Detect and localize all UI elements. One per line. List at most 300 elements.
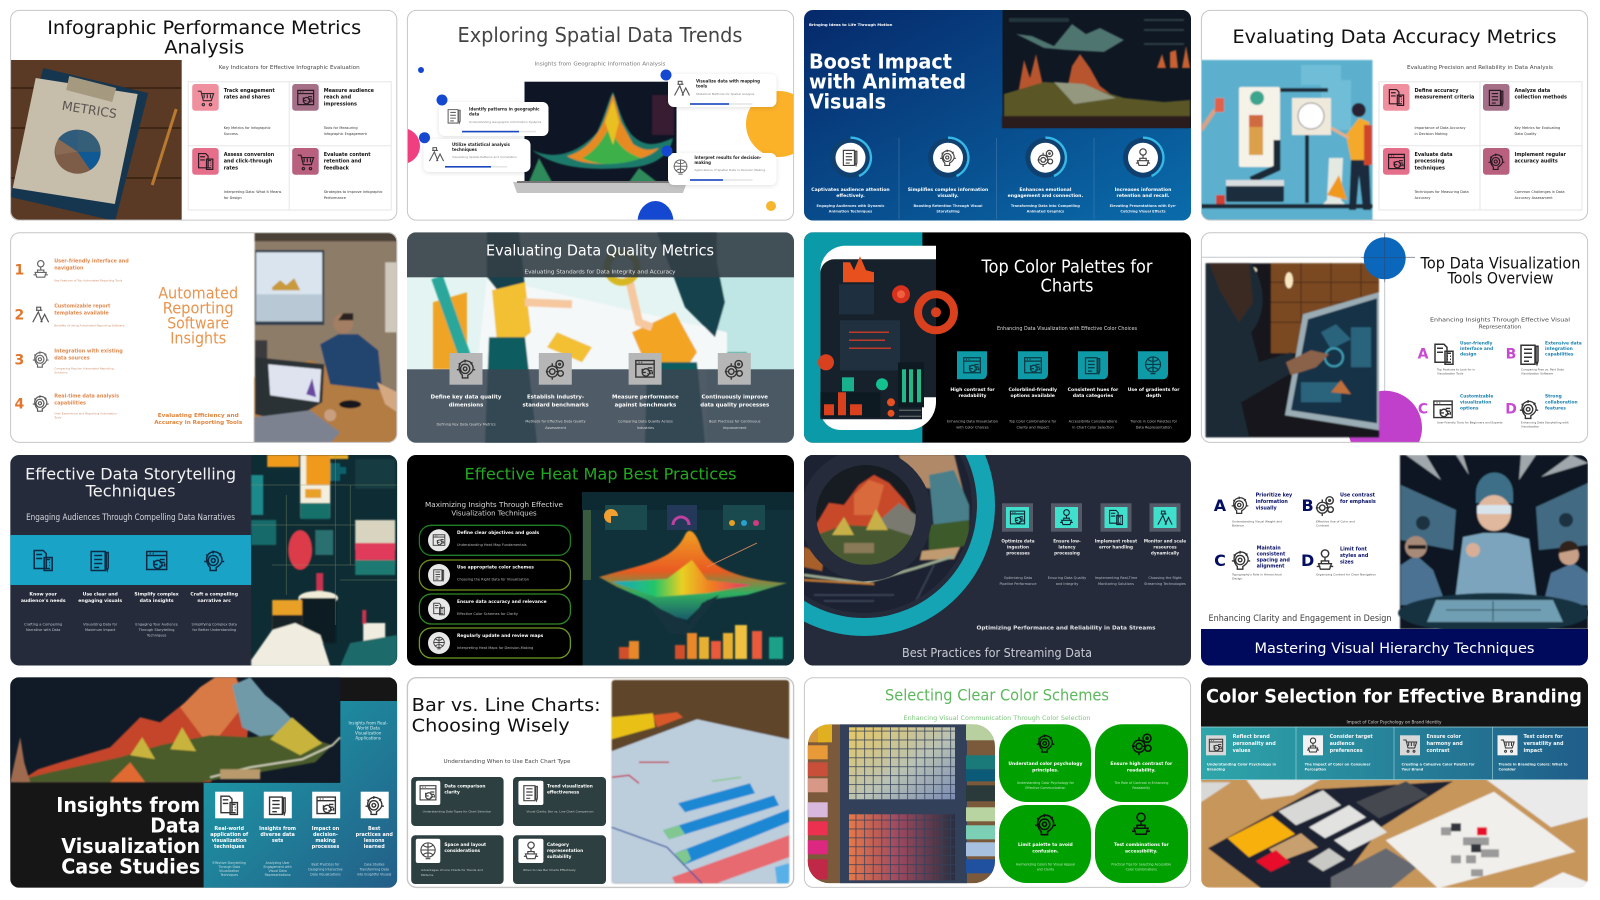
subtitle: Visualization Techniques bbox=[451, 510, 537, 518]
panel: Evaluating Data Quality Metrics bbox=[407, 232, 794, 443]
subtitle bbox=[1430, 317, 1571, 330]
item A bbox=[1418, 340, 1493, 375]
item: diverse data: Engagement with bbox=[264, 865, 292, 869]
item: analyze collection: collection methods bbox=[1514, 95, 1567, 101]
item: target audience: preferences bbox=[1330, 748, 1363, 754]
item: colorblind bbox=[1008, 351, 1057, 429]
tile: color psychology: principles. bbox=[1032, 767, 1059, 773]
pill: color schemes: Choosing the Right Data for Visualization bbox=[457, 578, 529, 582]
card: category representation: When to Use Bar Charts Effectively bbox=[523, 868, 576, 872]
item: target audience: Perception bbox=[1305, 767, 1326, 771]
item: dimensions: dimensions bbox=[449, 403, 483, 409]
panel: Bar vs. Line Charts: Choosing Wisely bbox=[407, 677, 794, 888]
item: know audience: Crafting a Compelling bbox=[24, 622, 62, 626]
item C: consistent bbox=[1257, 552, 1286, 558]
title bbox=[49, 20, 360, 58]
item 2: Benefits of Using Automated Reporting Software bbox=[54, 323, 125, 327]
subtitle: Enhancing Visual Communication Through Color Selection bbox=[904, 715, 1091, 722]
item 3: Integration with existing bbox=[54, 348, 123, 354]
item A: information bbox=[1256, 499, 1288, 505]
tile: high contrast: Ensure high contrast for bbox=[1110, 761, 1173, 767]
item: contrast: readability bbox=[958, 393, 987, 399]
item D: Limit font bbox=[1340, 546, 1368, 552]
photo: clipboard on wood desk: METRICS bbox=[61, 98, 118, 121]
item: optimize ingestion: ingestion bbox=[1007, 544, 1029, 550]
item C: C bbox=[1214, 551, 1226, 570]
image: data terrain bbox=[10, 677, 340, 783]
item: know audience: audience's needs bbox=[21, 598, 66, 604]
item: optimize ingestion bbox=[1000, 503, 1036, 586]
item: low latency bbox=[1048, 503, 1086, 586]
item: simplifies information: Boosting Retention Through Visual bbox=[914, 204, 982, 208]
item: narrative: Craft a compelling bbox=[190, 592, 238, 598]
item: measure audience bbox=[292, 84, 375, 136]
tile: test combinations: Practical Tips for Selecting Accessible bbox=[1111, 862, 1171, 866]
item C: Maintain bbox=[1257, 546, 1281, 552]
eyebrow: Bringing Ideas to Life Through Motion bbox=[809, 22, 893, 27]
item: monitor and scale: resources bbox=[1153, 544, 1177, 550]
item: enhances emotional: Transforming Data into Compelling bbox=[1011, 204, 1080, 208]
item A: Balance bbox=[1232, 524, 1244, 528]
card: trend visualization bbox=[513, 777, 606, 826]
item: benchmarks: standard benchmarks bbox=[522, 403, 589, 409]
item A: Understanding Visual Weight and bbox=[1232, 520, 1282, 524]
tile: limit palette: Limit palette to avoid bbox=[1018, 842, 1073, 848]
item: simplify: Engaging Your Audience bbox=[135, 622, 178, 626]
item D: sizes bbox=[1340, 560, 1354, 566]
item: color harmony bbox=[1400, 734, 1475, 771]
teal band bbox=[804, 232, 922, 443]
item D: Visualization bbox=[1521, 424, 1539, 428]
subtitle: World Data bbox=[357, 725, 380, 730]
item B: Comparing Free vs. Paid Data bbox=[1521, 367, 1564, 371]
illustration: scientist with instrument bbox=[1201, 60, 1372, 220]
item: diverse data: Analyzing User bbox=[266, 861, 290, 865]
item: measure audience: reach and bbox=[324, 95, 352, 101]
item: impact: making bbox=[315, 838, 336, 844]
item: define criteria: in Decision Making bbox=[1414, 132, 1447, 136]
pill: data accuracy: Ensure data accuracy and relevance bbox=[457, 599, 547, 605]
photo: clipboard on wood desk bbox=[10, 60, 182, 221]
title: Infographic Performance Metrics bbox=[47, 17, 361, 39]
callout: identify patterns: Identify patterns in geographic bbox=[469, 106, 540, 112]
item: measure: Industries bbox=[637, 426, 654, 430]
item D: Organizing Content for Clear Navigation bbox=[1316, 573, 1376, 577]
item D: features bbox=[1545, 405, 1566, 411]
decorative circles bbox=[408, 67, 794, 220]
card: trend visualization: Trend visualization bbox=[547, 783, 593, 789]
pill: data accuracy: Effective Color Schemes for Clarity bbox=[457, 612, 518, 616]
item 4: Tools bbox=[53, 415, 62, 419]
item: benchmarks: Establish industry- bbox=[527, 395, 584, 401]
item: contrast: with Color Choices bbox=[956, 425, 989, 429]
photo: brand board on desk bbox=[1201, 677, 1588, 888]
item: captivates attention: Captivates audience attention bbox=[811, 187, 890, 193]
item C: Design bbox=[1232, 576, 1242, 580]
title: Techniques bbox=[85, 482, 176, 500]
card: space and layout bbox=[411, 835, 504, 884]
item: diverse data: diverse data bbox=[260, 832, 295, 838]
item: gradients bbox=[1128, 351, 1180, 429]
photo: holographic design team bbox=[1398, 455, 1590, 633]
item: captivates attention bbox=[811, 138, 890, 214]
tile: limit palette: confusion. bbox=[1032, 848, 1059, 854]
item B: Visualization Software bbox=[1521, 371, 1553, 375]
item: benchmarks bbox=[522, 353, 589, 430]
item: brand personality: personality and bbox=[1233, 741, 1276, 747]
item 4: capabilities bbox=[54, 400, 86, 406]
item: brand personality: Understanding Color Psychology in bbox=[1207, 762, 1277, 766]
item: enhances emotional: engagement and connection. bbox=[1008, 193, 1083, 199]
panel: Selecting Clear Color Schemes bbox=[804, 677, 1191, 888]
item: impact: decision- bbox=[313, 832, 338, 838]
subtitle: Representation bbox=[1479, 324, 1522, 330]
item: best practices: learned bbox=[364, 844, 385, 850]
item: increases retention: Catching Visual Effects bbox=[1120, 210, 1166, 214]
item B bbox=[1301, 492, 1376, 528]
item: low latency: Ensure low- bbox=[1053, 538, 1081, 544]
item: optimize ingestion: Optimize data bbox=[1001, 538, 1035, 544]
header band bbox=[1201, 677, 1588, 727]
item: gradients: Use of gradients for bbox=[1128, 387, 1180, 393]
subtitle: Key Indicators for Effective Infographic Evaluation bbox=[219, 65, 360, 71]
item: increases retention: Elevating Presentations with Eye- bbox=[1110, 204, 1177, 208]
item A: User-friendly bbox=[1460, 340, 1492, 346]
item: simplify: Simplify complex bbox=[134, 592, 179, 598]
item: low latency: Ensuring Data Quality bbox=[1048, 576, 1086, 580]
item A: A bbox=[1418, 346, 1429, 362]
item: captivates attention: Animation Techniques bbox=[829, 210, 872, 214]
item 4: Real-time data analysis bbox=[54, 393, 119, 399]
item D: styles and bbox=[1340, 553, 1369, 559]
item: clear visuals: Visualizing Data for bbox=[83, 622, 118, 626]
item C: Customizable bbox=[1460, 393, 1493, 399]
item: simplify: data insights bbox=[140, 598, 174, 604]
item: evaluate content: retention and bbox=[324, 159, 362, 165]
item 4: User Experience and Reporting Automation bbox=[54, 411, 117, 415]
title: Insights bbox=[170, 328, 226, 347]
item: evaluate content: Evaluate content bbox=[324, 152, 371, 158]
card: category representation: representation bbox=[547, 848, 583, 854]
panel: Automated Reporting Software Insights bbox=[10, 232, 398, 443]
item: analyze collection: Key Metrics for Evaluating bbox=[1514, 126, 1560, 130]
subtitle: Impact of Color Psychology on Brand Identity bbox=[1346, 719, 1442, 724]
card: data comparison: Understanding Data Types for Chart Selection bbox=[423, 809, 491, 813]
item 3: 3 bbox=[15, 352, 24, 368]
item: best practices: Case Studies bbox=[364, 862, 385, 866]
item D: D bbox=[1301, 551, 1314, 570]
card: category representation: Category bbox=[547, 842, 569, 848]
tile: color psychology bbox=[999, 724, 1091, 802]
item: analyze collection: Data Quality bbox=[1514, 132, 1536, 136]
item: optimize ingestion: processes bbox=[1006, 550, 1030, 556]
item: contrast: Enhancing Data Visualization bbox=[947, 419, 998, 423]
teal band bbox=[1201, 727, 1588, 780]
callout: statistical analysis: Utilize statistical analysis bbox=[452, 142, 510, 147]
item: evaluate processing: processing bbox=[1414, 159, 1445, 165]
item: dimensions: Defining Key Data Quality Metrics bbox=[436, 422, 496, 426]
callout: interpret results: Applications of Spatial Data in Decision Making bbox=[694, 168, 765, 172]
item: gradients: depth bbox=[1146, 393, 1161, 399]
card: space and layout: Space and layout bbox=[444, 842, 486, 848]
item 1: Key Features of Top Automated Reporting Tools bbox=[54, 278, 123, 282]
item D: Strong bbox=[1545, 393, 1562, 399]
pill: update maps bbox=[419, 628, 570, 658]
title: Visualization bbox=[61, 834, 200, 858]
item: narrative bbox=[190, 550, 238, 632]
item A: design bbox=[1460, 351, 1477, 357]
item: error handling: Implementing Real-Time bbox=[1095, 576, 1137, 580]
ring image: data terrain bbox=[733, 374, 995, 636]
tile: limit palette: and Clarity bbox=[1037, 867, 1054, 871]
item: simplify: Techniques bbox=[146, 634, 166, 638]
item: simplify bbox=[134, 552, 179, 638]
item: track engagement bbox=[192, 84, 275, 136]
panel: Exploring Spatial Data Trends bbox=[406, 10, 794, 221]
item C bbox=[1214, 546, 1290, 580]
item: track engagement: rates and shares bbox=[224, 95, 270, 101]
title: Automated bbox=[158, 283, 238, 302]
item: know audience: Narrative with Data bbox=[26, 628, 60, 632]
footer band bbox=[407, 369, 794, 443]
item: target audience bbox=[1303, 734, 1373, 771]
item B: B bbox=[1506, 346, 1516, 362]
grid of metrics bbox=[188, 82, 391, 210]
tile: high contrast: The Role of Contrast in Enhancing bbox=[1113, 781, 1168, 785]
item C: visualization bbox=[1460, 399, 1491, 405]
item 3 bbox=[15, 348, 123, 374]
item: measure bbox=[612, 353, 679, 430]
tile: color psychology: Effective Communication bbox=[1025, 786, 1065, 790]
teal band bbox=[10, 535, 251, 585]
item: evaluate content: Performance bbox=[324, 196, 346, 200]
item: track engagement: Track engagement bbox=[224, 88, 275, 94]
item B: Contrast bbox=[1316, 524, 1330, 528]
item: assess conversion: and click-through bbox=[224, 159, 273, 165]
title bbox=[1420, 253, 1580, 287]
item: enhances emotional bbox=[1008, 138, 1083, 214]
item: enhances emotional: Animated Graphics bbox=[1027, 210, 1064, 214]
title: Top Data Visualization bbox=[1420, 253, 1580, 272]
laptop with rainbow chart bbox=[513, 82, 687, 193]
heat map image bbox=[582, 492, 794, 666]
item: best practices: Best bbox=[368, 826, 381, 832]
subtitle: Visualization bbox=[355, 730, 382, 735]
item: improve bbox=[700, 353, 769, 430]
item: simplifies information: visually. bbox=[937, 193, 959, 199]
pill: color schemes bbox=[419, 560, 570, 590]
item: versatility: Trends in Branding Colors: What to bbox=[1498, 762, 1568, 766]
card: space and layout: considerations bbox=[444, 848, 481, 854]
subtitle: Applications bbox=[355, 735, 381, 740]
item C: options bbox=[1460, 405, 1479, 411]
item: color harmony: Your Brand bbox=[1400, 767, 1424, 771]
title: Boost Impact bbox=[809, 50, 952, 74]
tile: test combinations: accessibility. bbox=[1125, 848, 1158, 854]
item: real-world: visualization bbox=[212, 838, 247, 844]
item: real-world bbox=[210, 792, 249, 877]
item: monitor and scale: dynamically bbox=[1151, 550, 1179, 556]
panel: Boost Impact with Animated Visuals bbox=[804, 10, 1191, 220]
item: improve: data quality processes bbox=[700, 403, 769, 409]
item: target audience: Consider target bbox=[1330, 734, 1373, 740]
item 1: navigation bbox=[54, 265, 84, 271]
tile: color psychology: Understanding Color Psychology for bbox=[1017, 781, 1075, 785]
item: diverse data bbox=[259, 792, 296, 877]
callout: identify patterns: Understanding Geographic Information Systems bbox=[469, 120, 542, 124]
subtitle: Maximizing Insights Through Effective bbox=[425, 501, 563, 509]
item A: A bbox=[1214, 496, 1227, 515]
item: define criteria: Importance of Data Accuracy bbox=[1414, 126, 1466, 130]
item: track engagement: Success bbox=[224, 132, 238, 136]
card: category representation: suitability bbox=[547, 854, 572, 860]
panel: Effective Data Storytelling Techniques bbox=[10, 455, 397, 666]
panel: Insights from Data Visualization Case Studies bbox=[10, 677, 397, 888]
callout: interpret results bbox=[662, 146, 776, 185]
item: measure: against benchmarks bbox=[615, 403, 676, 409]
footer band bbox=[1201, 629, 1588, 666]
dividers bbox=[899, 138, 1094, 219]
item: enhances emotional: Enhances emotional bbox=[1019, 187, 1072, 193]
item 3: Comparing Popular Automated Reporting bbox=[54, 366, 114, 370]
item: versatility: versatility and bbox=[1524, 741, 1564, 747]
title: Evaluating Data Accuracy Metrics bbox=[1232, 26, 1556, 48]
subtitle: Optimizing Performance and Reliability in Data Streams bbox=[976, 626, 1156, 632]
subtitle: Enhancing Data Visualization with Effective Color Choices bbox=[997, 326, 1137, 332]
image: swatch palettes bbox=[808, 724, 995, 883]
panel: Color Selection for Effective Branding bbox=[1201, 677, 1588, 888]
subtitle: Insights from Geographic Information Analysis bbox=[534, 62, 666, 68]
item: dimensions bbox=[431, 353, 502, 426]
panel: Best Practices for Streaming Data bbox=[733, 374, 1191, 666]
item: simplify: Through Storytelling bbox=[138, 628, 174, 632]
tile: test combinations: Test combinations for bbox=[1114, 842, 1170, 848]
item: real-world: Techniques bbox=[219, 873, 238, 877]
item: evaluate content: Strategies to Improve Infographic bbox=[324, 190, 383, 194]
callout: visualize with mapping tools bbox=[660, 70, 776, 107]
item: diverse data: Representations bbox=[265, 873, 291, 877]
title bbox=[981, 256, 1153, 296]
panel: Effective Heat Map Best Practices bbox=[407, 455, 794, 666]
title: Top Color Palettes for bbox=[981, 256, 1153, 277]
panel: Mastering Visual Hierarchy Techniques bbox=[1201, 455, 1590, 666]
panel: Infographic Performance Metrics Analysis bbox=[10, 10, 397, 221]
photo: man at touchscreen bbox=[1206, 263, 1379, 437]
subtitle: Evaluating Efficiency and bbox=[158, 413, 239, 419]
item: gradients: Trends in Color Palettes for bbox=[1129, 419, 1178, 423]
item: evaluate processing: Accuracy bbox=[1414, 196, 1430, 200]
item: measure audience: Measure audience bbox=[324, 88, 375, 94]
item: best practices: practices and bbox=[356, 832, 393, 838]
item B: B bbox=[1301, 496, 1314, 515]
item: impact: Designing Interactive bbox=[308, 867, 343, 871]
photo: meeting room bbox=[254, 232, 398, 443]
item C: alignment bbox=[1257, 564, 1285, 570]
title: Data bbox=[150, 813, 200, 837]
title: Charts bbox=[1040, 275, 1094, 296]
item A: Visualization Tools bbox=[1437, 371, 1464, 375]
blue circle bbox=[1364, 237, 1406, 279]
tile: limit palette bbox=[999, 805, 1091, 883]
item: consistent: Consistent hues for bbox=[1068, 387, 1119, 393]
item: improve: Continuously improve bbox=[701, 395, 768, 401]
card: category representation bbox=[513, 835, 606, 884]
item B: Use contrast bbox=[1340, 492, 1376, 498]
item: optimize ingestion: Optimizing Data bbox=[1004, 576, 1032, 580]
title: Evaluating Data Quality Metrics bbox=[486, 241, 714, 259]
callout: identify patterns bbox=[436, 94, 548, 136]
tile: test combinations: Color Combinations bbox=[1126, 867, 1157, 871]
item: analyze collection: Analyze data bbox=[1514, 88, 1550, 94]
pill: color schemes: Use appropriate color schemes bbox=[457, 564, 534, 570]
callout: statistical analysis: Visualizing Spatial Patterns and Correlation bbox=[452, 155, 517, 159]
card: data comparison bbox=[411, 777, 504, 826]
item A: visually bbox=[1256, 506, 1278, 512]
pill: define objectives: Understanding Heat Map Fundamentals bbox=[457, 543, 527, 547]
title: Selecting Clear Color Schemes bbox=[885, 685, 1109, 704]
item: evaluate processing bbox=[1383, 148, 1469, 200]
item 4 bbox=[15, 393, 119, 419]
item: versatility: impact bbox=[1524, 748, 1543, 754]
callout: visualize with mapping tools: tools bbox=[696, 84, 708, 88]
title: Visuals bbox=[809, 90, 886, 114]
item C: User-Friendly Tools for Beginners and Experts bbox=[1437, 420, 1503, 424]
subtitle: Engaging Audiences Through Compelling Data Narratives bbox=[26, 513, 235, 523]
item: diverse data: sets bbox=[272, 838, 283, 844]
item: implement audits: Common Challenges in Data bbox=[1514, 190, 1564, 194]
card: data comparison: clarity bbox=[444, 789, 460, 795]
title: Insights from bbox=[56, 793, 200, 817]
item: diverse data: Insights from bbox=[259, 826, 296, 832]
item: error handling: error handling bbox=[1099, 544, 1133, 550]
item C: Typography's Role in Hierarchical bbox=[1231, 573, 1282, 577]
title: Mastering Visual Hierarchy Techniques bbox=[1254, 641, 1534, 657]
subtitle bbox=[154, 413, 242, 426]
title: Effective Heat Map Best Practices bbox=[464, 464, 736, 484]
item: assess conversion: Interpreting Data: What It Means bbox=[224, 190, 282, 194]
item: know audience bbox=[21, 550, 66, 632]
item: impact bbox=[308, 792, 343, 876]
item 4: 4 bbox=[15, 396, 25, 412]
item 1 bbox=[15, 258, 129, 282]
title bbox=[25, 464, 236, 500]
item 1: User-friendly interface and bbox=[54, 258, 129, 264]
item: brand personality: values bbox=[1233, 748, 1251, 754]
item: assess conversion: for Design bbox=[224, 196, 242, 200]
title: Exploring Spatial Data Trends bbox=[458, 23, 742, 47]
item: assess conversion: Assess conversion bbox=[224, 152, 275, 158]
item: know audience: Know your bbox=[29, 592, 58, 598]
item: versatility: Consider bbox=[1498, 767, 1516, 771]
pill: data accuracy bbox=[419, 594, 570, 624]
item: improve: Improvement bbox=[723, 426, 747, 430]
item: best practices bbox=[356, 792, 393, 876]
item 3: Solutions bbox=[54, 370, 68, 374]
title: Tools Overview bbox=[1447, 268, 1554, 287]
subtitle: Enhancing Insights Through Effective Visual bbox=[1430, 317, 1571, 323]
item: monitor and scale: Streaming Technologies bbox=[1144, 582, 1186, 586]
item C: spacing and bbox=[1257, 558, 1290, 564]
subtitle bbox=[349, 720, 388, 740]
item: error handling bbox=[1095, 503, 1137, 586]
subtitle: Understanding When to Use Each Chart Type bbox=[444, 759, 570, 765]
image: 3D data terrain bbox=[1002, 10, 1191, 128]
item: evaluate processing: Evaluate data bbox=[1414, 152, 1453, 158]
item: evaluate processing: techniques bbox=[1414, 165, 1445, 171]
title: Color Selection for Effective Branding bbox=[1206, 685, 1582, 707]
item: measure: Comparing Data Quality Across bbox=[618, 419, 673, 423]
title: with Animated bbox=[809, 70, 966, 94]
